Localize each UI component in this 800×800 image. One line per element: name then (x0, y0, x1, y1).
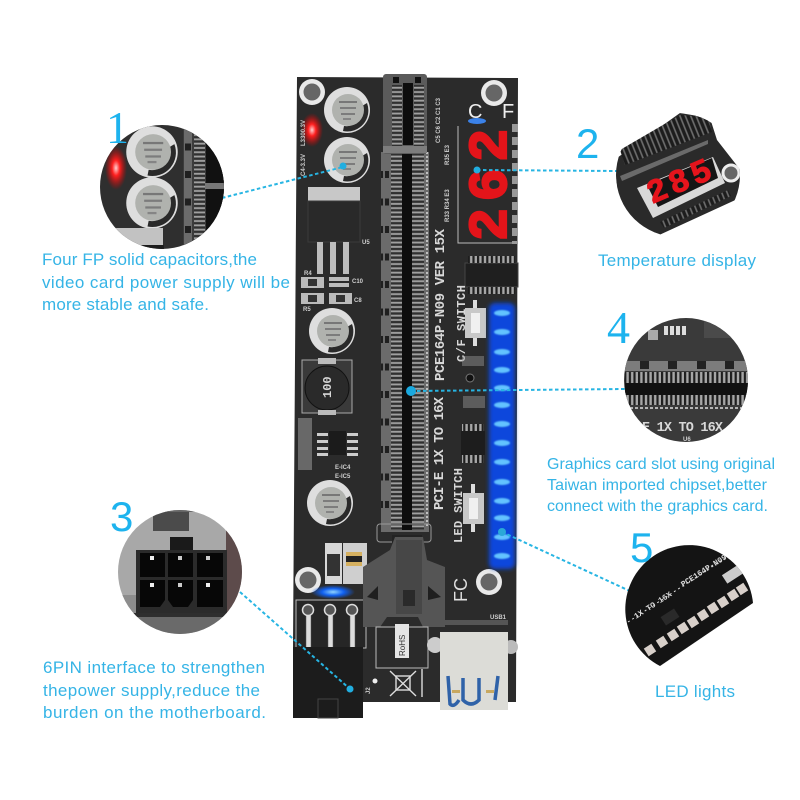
inset: display: 285 (641, 151, 722, 213)
caption 3: burden on the motherboard. (43, 703, 266, 722)
C and F labels: C (468, 101, 482, 123)
caption 4: connect with the graphics card. (547, 498, 768, 515)
PCIe slot (377, 74, 431, 542)
callout lines (222, 162, 632, 692)
inset: capacitors (100, 125, 224, 249)
temperature digits: 262 (460, 122, 523, 241)
LED switch (463, 484, 484, 532)
caption 1: video card power supply will be (42, 273, 290, 292)
voltage regulator: U5 (362, 240, 370, 246)
resistor labels: R35 E3 (445, 144, 451, 165)
FCC mark: FC (451, 578, 471, 602)
C/F switch (462, 300, 486, 382)
panel 4: graphics slot (547, 302, 775, 515)
inductor: 100 (321, 376, 335, 398)
USB port: USB1 (490, 615, 507, 621)
panel 2: temperature display (576, 113, 756, 270)
caption 4: Taiwan imported chipset,better (547, 477, 768, 494)
caption 1: Four FP solid capacitors,the (42, 250, 257, 269)
voltage regulator (308, 187, 370, 274)
heading number 4: 4 (607, 302, 630, 353)
display driver IC (465, 256, 518, 294)
inset: display (614, 113, 742, 236)
panel 5: LED lights (625, 533, 753, 700)
inset: slot: E 1X TO 16X (642, 421, 724, 436)
PCB body (293, 77, 518, 718)
caption 5: LED lights (655, 682, 735, 701)
C and F labels (468, 101, 514, 124)
power LED: L3300.3V (301, 120, 307, 146)
RoHS mark: RoHS (398, 635, 407, 656)
heading number 3: 3 (110, 493, 133, 540)
6-pin connector (293, 647, 378, 718)
power LED (301, 113, 323, 176)
silkscreen: slot: PCI-E 1X TO 16X (432, 396, 448, 510)
USB port (427, 615, 518, 710)
caption 4: Graphics card slot using original (547, 456, 775, 473)
riser board (293, 74, 523, 718)
inset: LEDs: 1X TO 16X (633, 590, 674, 622)
heading number 1: 1 (106, 102, 129, 153)
6-pin connector: J2 (366, 687, 372, 694)
leader 1 (222, 162, 346, 198)
RoHS mark (376, 624, 428, 668)
leader 4 (406, 386, 625, 396)
leader 3 (240, 592, 354, 692)
resistors (301, 271, 364, 313)
panel 3: 6-pin connector (43, 493, 266, 722)
diodes (325, 543, 367, 584)
power header pins (296, 600, 366, 650)
small IC (298, 418, 358, 480)
caption 3: thepower supply,reduce the (43, 681, 260, 700)
silkscreen: C/F switch: C/F SWITCH (455, 285, 469, 362)
inset: LEDs (625, 545, 753, 666)
small IC: E-IC4 (335, 465, 351, 471)
heading number 5: 5 (630, 524, 653, 571)
C and F labels: F (502, 101, 514, 123)
U6 IC (461, 396, 485, 463)
inductor (302, 358, 352, 415)
caption 3: 6PIN interface to strengthen (43, 658, 265, 677)
caption 4 (547, 456, 775, 515)
silkscreen: LED switch: LED SWITCH (452, 468, 466, 543)
caption 2: Temperature display (598, 251, 756, 270)
heading number 2: 2 (576, 120, 599, 167)
caption 3 (43, 658, 266, 722)
inset: slot: U6 (683, 437, 691, 443)
power LED: C4-3.3V (301, 154, 307, 176)
blue indicator LED (311, 585, 355, 599)
leader 5 (498, 528, 632, 592)
silkscreen: model: PCE164P-N09 VER 15X (433, 228, 449, 381)
mounting holes (295, 79, 507, 595)
resistor labels: C5 C6 C2 C1 C3 (436, 97, 442, 143)
resistors: R4 (304, 271, 312, 277)
resistor labels (436, 97, 451, 222)
latch (363, 535, 445, 627)
resistors: C10 (352, 279, 364, 285)
leader 2 (474, 166, 617, 174)
recycle bin mark (390, 669, 422, 697)
caption 1 (42, 250, 290, 314)
resistors: R5 (303, 307, 311, 313)
blue LED strip (489, 303, 515, 569)
resistors: C8 (354, 298, 362, 304)
small IC: E-IC5 (335, 474, 351, 480)
inset: LEDs: PCE164P-N09 (680, 553, 729, 590)
caption 1: more stable and safe. (42, 295, 209, 314)
solid capacitors (307, 87, 370, 526)
panel 1: capacitors (42, 102, 290, 314)
resistor labels: R33 R34 E3 (445, 189, 451, 222)
inset: slot (620, 315, 750, 445)
inset: 6-pin (118, 510, 242, 634)
